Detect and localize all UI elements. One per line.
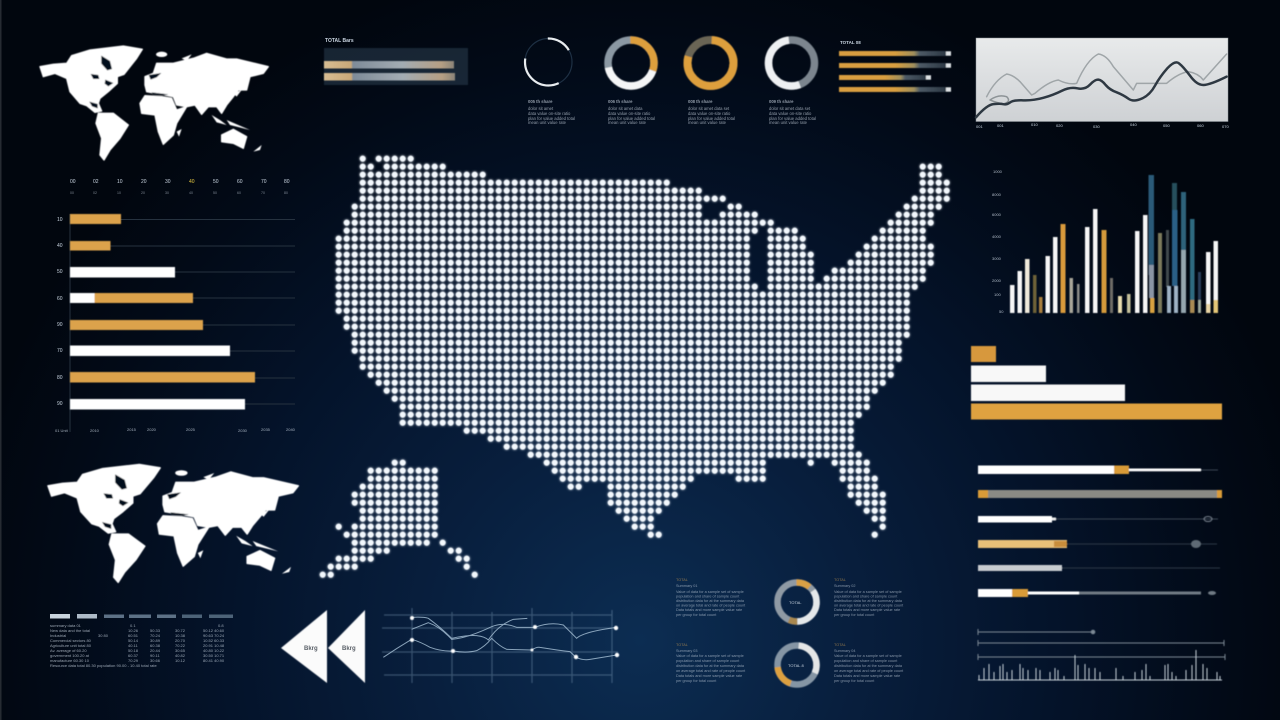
- columns: [1010, 175, 1218, 313]
- bars: [70, 214, 255, 410]
- upper left text: [676, 578, 746, 617]
- table rows: 90.63 70.24: [203, 633, 225, 638]
- y axis labels: 50: [999, 309, 1004, 314]
- bottom axis labels: 2040: [286, 427, 296, 432]
- upper left text: per group for total count: [676, 613, 717, 617]
- donut three: [688, 40, 734, 86]
- caption one: 005 th share: [528, 99, 553, 104]
- row six: [978, 589, 1216, 597]
- table rows: 30 80: [98, 633, 109, 638]
- bottom axis labels: [55, 427, 296, 433]
- progress bars lower right: [978, 466, 1222, 597]
- caption four: [769, 99, 816, 125]
- row labels: 90: [57, 322, 63, 328]
- caption two: mean unit value rate: [608, 120, 647, 125]
- caption one: data value on-site ratio: [528, 111, 571, 116]
- row labels: 50: [57, 269, 63, 275]
- bars: [839, 51, 951, 92]
- donut two: [608, 40, 654, 86]
- table rows: 30.65: [175, 648, 186, 653]
- bottom centre rings and text: [676, 578, 904, 684]
- top scale labels: 02: [93, 179, 99, 185]
- triangle labels: Bkrg: [304, 646, 318, 652]
- second row of scale labels: 02: [93, 191, 97, 195]
- table rows: 20.70: [175, 638, 186, 643]
- y axis labels: 6000: [992, 212, 1002, 217]
- step two: [971, 366, 1046, 382]
- right triangle: [328, 610, 365, 683]
- grid: [382, 608, 618, 683]
- caption three: dolor sit amet data set: [688, 106, 730, 111]
- caption three: [688, 99, 735, 125]
- table rows: summary data 01: [50, 623, 82, 628]
- donut captions: [528, 99, 816, 125]
- table rows: 20.44: [150, 648, 161, 653]
- line chart panel top right: [976, 38, 1229, 129]
- table rows: 80.41 40.90: [203, 658, 225, 663]
- row labels: 70: [57, 348, 63, 354]
- step four: [971, 404, 1222, 420]
- world map top left: [40, 46, 268, 160]
- table rows: 10.52 60.33: [203, 638, 225, 643]
- table rows: 50.12 40.60: [203, 628, 225, 633]
- top scale labels: 20: [141, 179, 147, 185]
- second row of scale labels: 00: [70, 191, 74, 195]
- top scale labels: 30: [165, 179, 171, 185]
- second row of scale labels: 10: [117, 191, 121, 195]
- lower left text: Data totals and more sample value rate: [676, 674, 742, 678]
- x labels: [976, 122, 1229, 129]
- table rows: 40.80 10.22: [203, 648, 225, 653]
- table rows: 90.11: [150, 653, 160, 658]
- mini axis and spike chart lower right: [978, 629, 1225, 680]
- top scale labels: 10: [117, 179, 123, 185]
- caption two: [608, 99, 655, 125]
- upper right text: Summary 02: [834, 584, 856, 588]
- x labels: 050: [1163, 123, 1170, 128]
- table rows: 60.38: [150, 643, 161, 648]
- table rows: 50.33: [150, 628, 161, 633]
- triangle labels: Bkrg: [342, 646, 356, 652]
- table rows: manufacture 60.30 10: [50, 658, 90, 663]
- lower right text: TOTAL: [834, 643, 846, 647]
- lower left text: per group for total count: [676, 679, 717, 683]
- lower left text: Value of data for a sample set of sample: [676, 654, 744, 658]
- table rows: 10.12: [175, 658, 186, 663]
- axis lines: [978, 629, 1225, 660]
- stepped horizontal bars right: [971, 346, 1222, 420]
- upper left text: Data totals and more sample value rate: [676, 608, 742, 612]
- contiguous states: [339, 159, 948, 535]
- bottom axis labels: 2010: [90, 428, 100, 433]
- track lines: [70, 214, 295, 432]
- x labels: 010: [1031, 122, 1038, 127]
- bottom axis labels: 2035: [261, 427, 271, 432]
- second row of scale labels: 70: [261, 191, 265, 195]
- y axis labels: 2000: [992, 278, 1002, 283]
- x labels: 001: [976, 124, 983, 129]
- row labels: 60: [57, 296, 63, 302]
- row two: [978, 490, 1222, 498]
- caption two: plan for value added total: [608, 116, 655, 121]
- caption three: plan for value added total: [688, 116, 735, 121]
- lower ring label: TOTAL 8: [788, 663, 804, 668]
- title: TOTAL 08: [840, 40, 861, 45]
- line chart bottom centre: [382, 608, 619, 683]
- upper right text: [834, 578, 904, 617]
- top scale labels: 70: [261, 179, 267, 185]
- row labels: 80: [57, 375, 63, 381]
- y axis labels: 8000: [992, 192, 1002, 197]
- row four: [978, 540, 1217, 548]
- lower right text: [834, 643, 904, 683]
- top scale labels: 60: [237, 179, 243, 185]
- row three: [978, 516, 1218, 522]
- Alaska: [323, 463, 476, 575]
- second row of scale labels: 30: [165, 191, 169, 195]
- table rows: Resource data total 80.30 population 90.00 - 10.40 total rate: [50, 663, 158, 668]
- top scale labels: 40: [189, 179, 195, 185]
- lower right text: per group for total count: [834, 679, 875, 683]
- bottom axis labels: 2025: [186, 427, 196, 432]
- upper right text: Data totals and more sample value rate: [834, 608, 900, 612]
- caption four: dolor sit amet data set: [769, 106, 811, 111]
- table rows: Industrial: [50, 633, 66, 638]
- triangle labels: [304, 646, 356, 652]
- lower left text: [676, 643, 746, 683]
- rewind triangles: [281, 610, 365, 683]
- upper left text: on average total and rate of people count: [676, 604, 746, 608]
- y axis labels: 3000: [992, 256, 1002, 261]
- upper right text: population and share of sample count: [834, 594, 898, 598]
- second row of scale labels: 60: [237, 191, 241, 195]
- upper right text: on average total and rate of people count: [834, 604, 904, 608]
- table rows: Agriculture unit total 80: [50, 643, 92, 648]
- x labels: 001: [997, 123, 1004, 128]
- table rows: 0.1: [130, 623, 136, 628]
- table rows: 20.91 10.48: [203, 643, 225, 648]
- lower left text: TOTAL: [676, 643, 688, 647]
- top scale labels: 80: [284, 179, 290, 185]
- second row of scale labels: 50: [213, 191, 217, 195]
- upper left text: Summary 01: [676, 584, 698, 588]
- upper right text: TOTAL: [834, 578, 846, 582]
- row one: [324, 61, 454, 68]
- points: [410, 616, 619, 659]
- top scale labels: 00: [70, 179, 76, 185]
- orange progress bars top: [839, 40, 951, 92]
- lower right text: Value of data for a sample set of sample: [834, 654, 902, 658]
- caption three: data value on-site ratio: [688, 111, 731, 116]
- bottom axis labels: 2020: [147, 427, 157, 432]
- x labels: 040: [1130, 122, 1137, 127]
- table rows: 60.51: [128, 633, 139, 638]
- top scale labels: [70, 179, 290, 185]
- table rows: 40.11: [128, 643, 138, 648]
- x labels: 070: [1222, 124, 1229, 129]
- lower right text: on average total and rate of people count: [834, 669, 904, 673]
- row five: [978, 565, 1220, 571]
- lower right text: population and share of sample count: [834, 659, 898, 663]
- lower right text: distribution data for at the summary data: [834, 664, 903, 668]
- table rows: [50, 623, 225, 668]
- table rows: 40.82: [175, 653, 186, 658]
- lower left text: on average total and rate of people count: [676, 669, 746, 673]
- bar chart left: [55, 179, 296, 433]
- panel title: TOTAL Bars: [325, 38, 354, 44]
- header chips: [50, 614, 233, 618]
- table rows: Commercial sectors 80: [50, 638, 92, 643]
- row labels: [57, 217, 63, 407]
- x labels: 030: [1093, 124, 1100, 129]
- bottom axis labels: 2015: [127, 427, 137, 432]
- table rows: 10.38: [175, 633, 186, 638]
- caption three: 008 th share: [688, 99, 713, 104]
- row labels: 90: [57, 401, 63, 407]
- caption four: 009 th share: [769, 99, 794, 104]
- caption one: plan for value added total: [528, 116, 575, 121]
- table rows: 30.66: [150, 658, 161, 663]
- left triangle: [281, 610, 327, 683]
- table rows: New data and the total: [50, 628, 90, 633]
- table rows: government 100.20 at: [50, 653, 90, 658]
- caption one: mean unit value rate: [528, 120, 567, 125]
- row one: [978, 466, 1218, 474]
- y axis labels: 4000: [992, 234, 1002, 239]
- x labels: 060: [1197, 123, 1204, 128]
- upper left text: TOTAL: [676, 578, 688, 582]
- second row of scale labels: 40: [189, 191, 193, 195]
- chart background: [976, 38, 1228, 122]
- caption four: mean unit value rate: [769, 120, 808, 125]
- stacked bars panel top: [324, 38, 468, 85]
- upper left text: Value of data for a sample set of sample: [676, 590, 744, 594]
- table rows: 70.29: [128, 658, 139, 663]
- upper left text: distribution data for at the summary data: [676, 599, 745, 603]
- caption two: 006 th share: [608, 99, 633, 104]
- upper right text: distribution data for at the summary data: [834, 599, 903, 603]
- donut four: [768, 40, 814, 86]
- upper ring label: TOTAL: [789, 600, 802, 605]
- y axis labels: [992, 169, 1004, 314]
- world map bottom left: [48, 464, 298, 582]
- caption four: plan for value added total: [769, 116, 816, 121]
- table rows: 30.50 10.71: [203, 653, 225, 658]
- row labels: 10: [57, 217, 63, 223]
- caption two: dolor sit amet data: [608, 106, 643, 111]
- table rows: 30.72: [175, 628, 186, 633]
- table rows: 60.37: [128, 653, 139, 658]
- second row of scale labels: 20: [141, 191, 145, 195]
- caption four: data value on-site ratio: [769, 111, 812, 116]
- y axis labels: 100: [994, 292, 1001, 297]
- table rows: 0.8: [218, 623, 224, 628]
- lower left text: distribution data for at the summary data: [676, 664, 745, 668]
- table rows: 70.22: [175, 643, 186, 648]
- y axis labels: 1000: [993, 169, 1003, 174]
- donut row top: [525, 38, 814, 86]
- lower right text: Data totals and more sample value rate: [834, 674, 900, 678]
- upper right text: per group for total count: [834, 613, 875, 617]
- dotted map of the United States: [323, 159, 948, 575]
- lines: [383, 617, 617, 660]
- row two: [324, 73, 455, 80]
- lower ring: [778, 646, 816, 684]
- lower left text: Summary 03: [676, 649, 698, 653]
- table rows: 30.89: [150, 638, 161, 643]
- panel background: [324, 48, 468, 85]
- second row of scale labels: [70, 191, 288, 195]
- lower left text: population and share of sample count: [676, 659, 740, 663]
- second row of scale labels: 80: [284, 191, 288, 195]
- upper ring: [778, 582, 816, 622]
- step one: [971, 346, 996, 362]
- top scale labels: 50: [213, 179, 219, 185]
- upper right text: Value of data for a sample set of sample: [834, 590, 902, 594]
- x labels: 020: [1056, 123, 1063, 128]
- row labels: 40: [57, 243, 63, 249]
- lines: [976, 54, 1227, 117]
- table rows: Av. average of 60.20: [50, 648, 87, 653]
- caption one: dolor sit amet: [528, 106, 554, 111]
- bottom axis labels: 2030: [238, 428, 248, 433]
- table rows: 10.26: [128, 628, 139, 633]
- table rows: 50.14: [128, 638, 139, 643]
- column chart right: [992, 169, 1218, 314]
- table rows: 70.24: [150, 633, 161, 638]
- data table lower left: [50, 614, 233, 668]
- caption one: [528, 99, 575, 125]
- donut one: [525, 38, 572, 86]
- caption three: mean unit value rate: [688, 120, 727, 125]
- spike histogram: [978, 650, 1222, 680]
- lower right text: Summary 04: [834, 649, 856, 653]
- caption two: data value on-site ratio: [608, 111, 651, 116]
- upper left text: population and share of sample count: [676, 594, 740, 598]
- table rows: 50.18: [128, 648, 139, 653]
- bottom axis labels: 01 Unit: [55, 428, 69, 433]
- step three: [971, 384, 1125, 401]
